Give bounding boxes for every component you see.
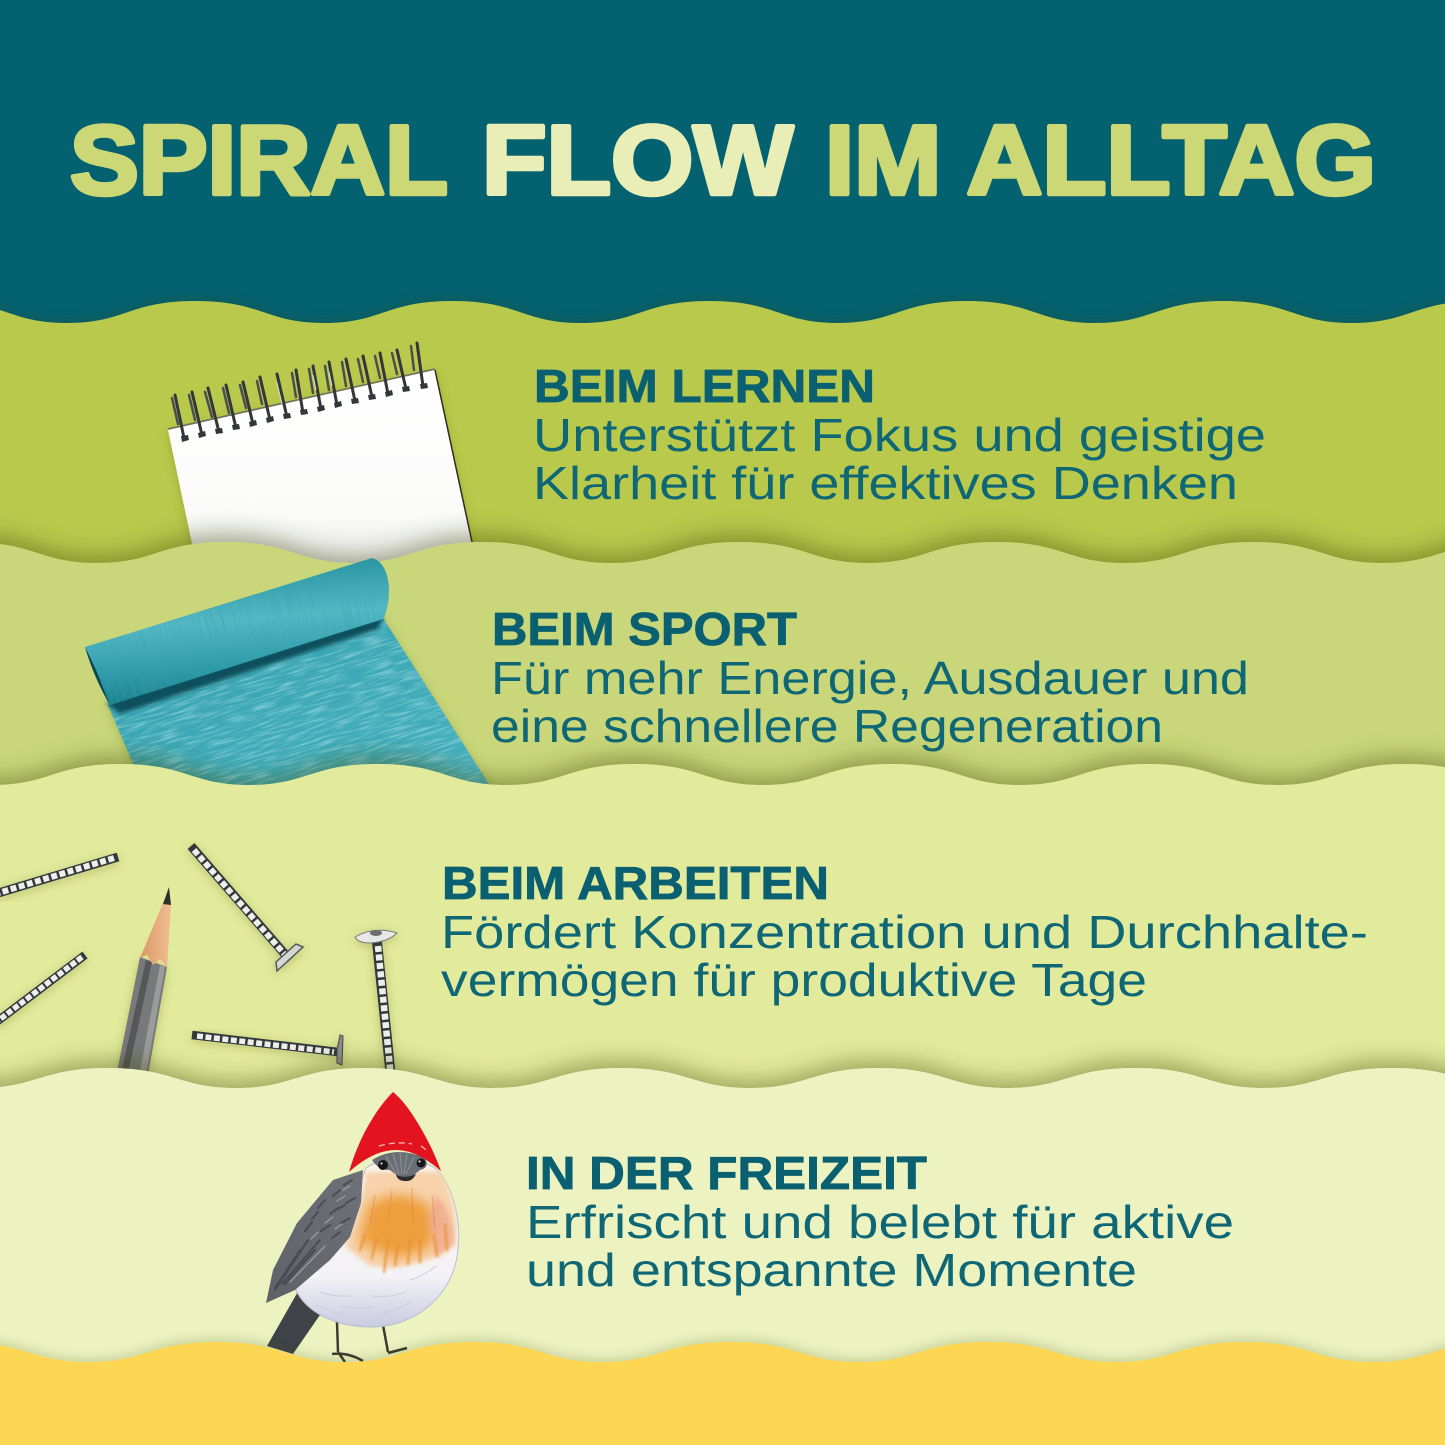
text block: beim arbeiten: [441, 857, 1368, 1006]
header background: [0, 0, 1445, 340]
title: [70, 105, 1376, 215]
text block: beim lernen: [533, 360, 1266, 509]
text block: beim sport: BEIM SPORT: [492, 603, 797, 655]
icon: yoga mat: [85, 558, 490, 785]
title: IM ALLTAG: [825, 105, 1376, 215]
icon: spiral notebook: [168, 343, 478, 572]
wave layer: pale lime: [0, 764, 1445, 1445]
panel: beim lernen: [0, 301, 1445, 1445]
text block: beim arbeiten: BEIM ARBEITEN: [442, 857, 829, 909]
text block: in der freizeit: IN DER FREIZEIT: [526, 1147, 927, 1199]
text block: beim arbeiten: vermögen für produktive Tage: [441, 954, 1147, 1006]
text block: beim sport: eine schnellere Regeneration: [491, 700, 1163, 752]
text block: beim lernen: BEIM LERNEN: [534, 360, 875, 412]
title: SPIRAL: [70, 105, 448, 215]
title: FLOW: [482, 105, 794, 215]
text block: beim lernen: Klarheit für effektives Denken: [533, 457, 1238, 509]
icon: screw right: [355, 930, 397, 1078]
icon: screw center: [191, 846, 303, 971]
icon: robin with red hat: [266, 1092, 459, 1362]
text block: beim lernen: Unterstützt Fokus und geistige: [533, 409, 1266, 461]
text block: beim sport: Für mehr Energie, Ausdauer und: [491, 652, 1249, 704]
icon: screw bottom: [192, 1035, 343, 1065]
panel: beim sport: [0, 520, 1445, 785]
text block: beim arbeiten: Fördert Konzentration und Durchhalte-: [441, 906, 1368, 958]
text block: in der freizeit: [526, 1147, 1234, 1296]
text block: in der freizeit: und entspannte Momente: [526, 1244, 1137, 1296]
text block: beim sport: [491, 603, 1249, 752]
icon: pencil: [113, 887, 171, 1092]
text block: in der freizeit: Erfrischt und belebt für aktive: [526, 1196, 1234, 1248]
wave layer: light lime: [0, 542, 1445, 1445]
footer wave: yellow: [0, 1342, 1445, 1445]
icon: screw top left: [0, 857, 118, 894]
wave layer: lime: [0, 301, 1445, 1445]
panel: beim arbeiten: [0, 764, 1445, 1445]
panel: in der freizeit: [0, 1068, 1445, 1445]
wave layer: cream lime: [0, 1068, 1445, 1445]
icon: screw lower left: [0, 955, 85, 1023]
